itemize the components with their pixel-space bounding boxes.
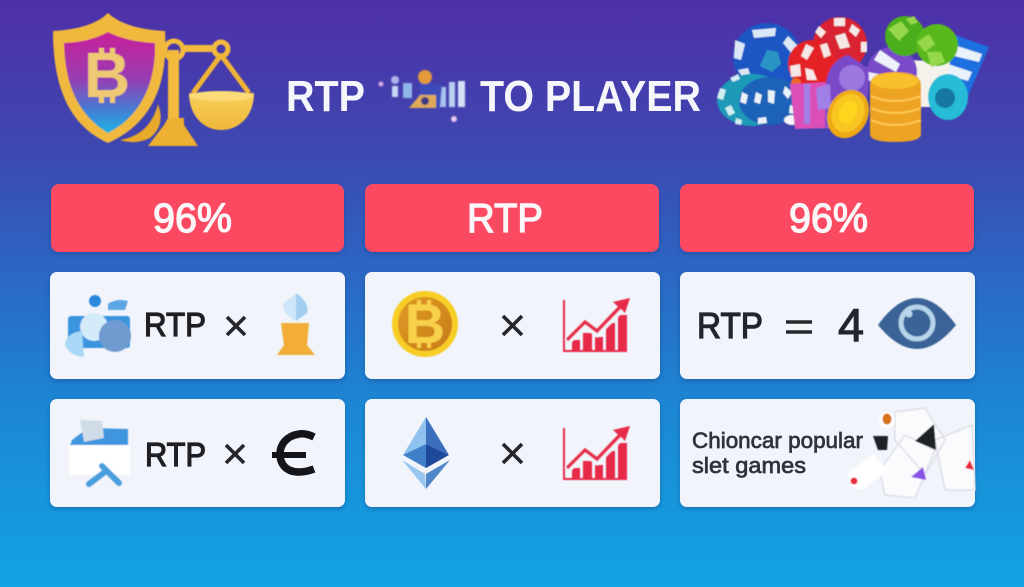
icon: mini bar chart with coin xyxy=(378,70,465,122)
header bar: RTP xyxy=(365,184,659,252)
text: popular slot games xyxy=(692,428,863,478)
icon: bitcoin shield with scales xyxy=(53,13,254,146)
card: Ethereum x chart xyxy=(365,399,660,507)
icon: casino chips, gems and coins xyxy=(717,16,989,145)
multiply sign xyxy=(503,316,522,335)
green gems xyxy=(885,16,958,67)
icon: blue tokens xyxy=(65,295,131,357)
icon: eye xyxy=(878,298,956,349)
multiply sign xyxy=(227,317,245,335)
red chips xyxy=(788,17,867,88)
text: RTP: RTP xyxy=(697,305,763,346)
header bar: 96% left xyxy=(51,184,344,252)
bitcoin symbol: B xyxy=(84,39,130,111)
purple chip xyxy=(867,47,917,97)
text: RTP: RTP xyxy=(145,436,206,473)
icon: gem on gold pedestal xyxy=(277,293,315,355)
gold coin xyxy=(819,83,877,145)
icon: euro sign xyxy=(272,434,314,472)
card: RTP = 4 eye xyxy=(680,272,975,379)
icon: rising red chart xyxy=(563,426,630,480)
icon: shield xyxy=(53,13,165,143)
card: popular slot games xyxy=(680,399,975,507)
teal die xyxy=(928,74,968,120)
header bar: RTP: RTP xyxy=(467,195,543,241)
teal and blue chip xyxy=(717,74,801,126)
icon: scales xyxy=(120,41,254,146)
gold coin stack xyxy=(870,72,921,142)
header bar: 96% right: 96% xyxy=(789,195,868,241)
icon: white box with blue tool xyxy=(69,420,130,484)
multiply sign xyxy=(503,444,522,463)
pink and purple gems xyxy=(790,55,869,129)
icon: rising red chart xyxy=(563,298,630,352)
text: popular slot games: slet games xyxy=(692,453,806,478)
stripes card and white card xyxy=(908,35,989,107)
icon: Ethereum diamond xyxy=(402,417,450,489)
equals sign xyxy=(786,322,812,332)
card: bitcoin x chart xyxy=(365,272,660,379)
multiply sign xyxy=(226,445,244,463)
card: RTP x token xyxy=(50,272,345,379)
number 4: 4 xyxy=(838,299,864,351)
title text: RTP: RTP xyxy=(286,72,365,121)
title text: TO PLAYER: TO PLAYER xyxy=(480,72,701,121)
icon: bitcoin coin xyxy=(392,291,458,357)
icon: white playing pieces xyxy=(849,408,975,498)
text: popular slot games: Chioncar popular xyxy=(692,428,863,453)
icon: bitcoin coin: B xyxy=(405,292,445,355)
title xyxy=(286,70,701,122)
header bar: 96% left: 96% xyxy=(153,195,232,241)
header bar: 96% right xyxy=(680,184,974,252)
blue chip xyxy=(733,23,801,91)
card: RTP x euro xyxy=(50,399,345,507)
text: RTP: RTP xyxy=(144,306,206,343)
